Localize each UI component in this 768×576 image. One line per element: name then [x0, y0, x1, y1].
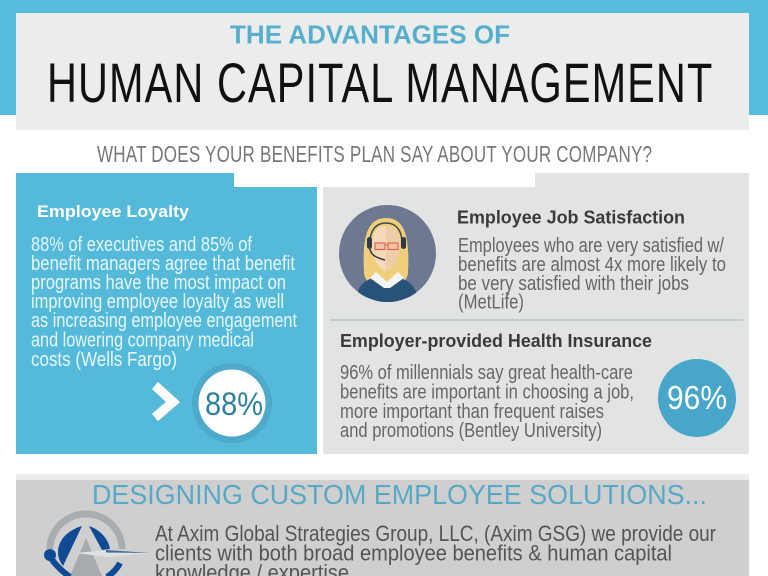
loyalty text: programs have the most impact on	[31, 272, 286, 294]
subtitle: WHAT DOES YOUR BENEFITS PLAN SAY ABOUT YOUR COMPANY?	[97, 143, 652, 168]
job satisfaction text: (MetLife)	[458, 292, 524, 314]
insurance heading: Employer-provided Health Insurance	[340, 331, 652, 351]
stat circle 88%	[192, 363, 272, 443]
icon: support agent avatar	[339, 205, 436, 304]
loyalty text: and lowering company medical	[31, 330, 254, 352]
panel: employee loyalty	[16, 173, 317, 454]
insurance text: benefits are important in choosing a job,	[340, 382, 634, 404]
loyalty heading: Employee Loyalty	[37, 202, 190, 221]
stat circle 96%	[658, 359, 736, 437]
job satisfaction text: benefits are almost 4x more likely to	[458, 254, 726, 276]
insurance text: more important than frequent raises	[340, 401, 604, 423]
loyalty text: costs (Wells Fargo)	[31, 349, 177, 371]
loyalty text: improving employee loyalty as well	[31, 291, 284, 313]
loyalty text	[31, 234, 297, 371]
icon: chevron	[153, 383, 179, 420]
header blue band	[0, 0, 768, 115]
stat circle 96%: 96%	[667, 379, 727, 416]
panel: designing custom employee solutions	[16, 474, 749, 576]
loyalty text: as increasing employee engagement	[31, 310, 297, 332]
stat circle 88%: 88%	[205, 386, 263, 422]
job satisfaction heading: Employee Job Satisfaction	[457, 208, 685, 228]
insurance text: and promotions (Bentley University)	[340, 420, 602, 442]
solutions heading: DESIGNING CUSTOM EMPLOYEE SOLUTIONS...	[92, 479, 707, 510]
job satisfaction text	[458, 235, 726, 314]
panel: satisfaction and insurance	[323, 173, 749, 454]
title panel	[16, 13, 749, 130]
insurance text	[340, 362, 634, 442]
solutions text: clients with both broad employee benefits & human capital	[155, 540, 672, 566]
solutions text	[155, 521, 716, 576]
title kicker: THE ADVANTAGES OF	[230, 20, 510, 50]
loyalty text: benefit managers agree that benefit	[31, 253, 295, 275]
insurance text: 96% of millennials say great health-care	[340, 362, 633, 384]
job satisfaction text: be very satisfied with their jobs	[458, 273, 689, 295]
main title: HUMAN CAPITAL MANAGEMENT	[47, 52, 712, 115]
icon: Axim logo	[44, 514, 150, 576]
loyalty text: 88% of executives and 85% of	[31, 234, 252, 256]
